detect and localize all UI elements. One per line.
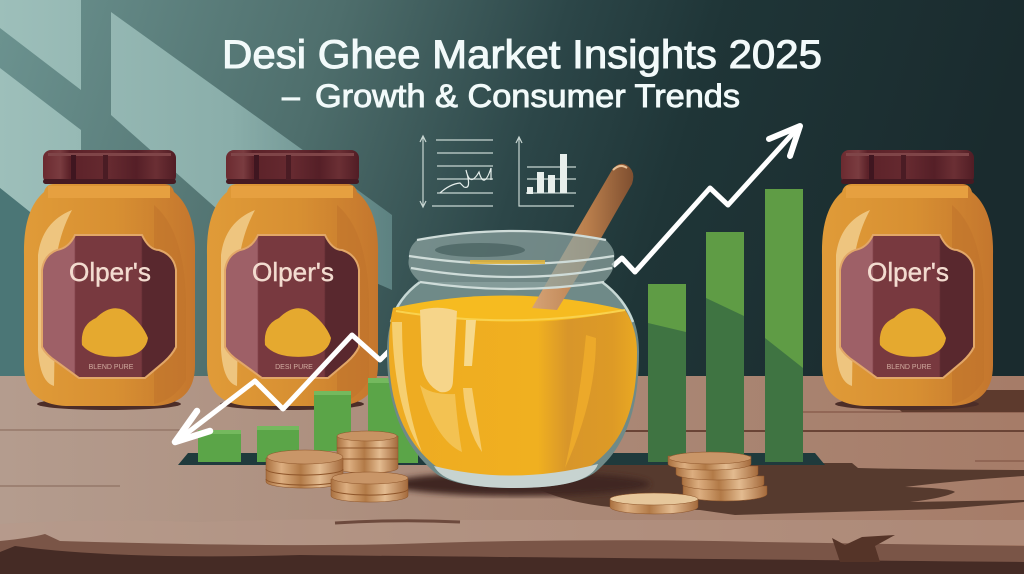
ghee highlights: [420, 308, 457, 392]
line chart icon: [420, 136, 493, 207]
glass jar of ghee: [387, 164, 639, 488]
jar: middle: [207, 150, 378, 410]
window light beams: [0, 0, 392, 290]
label: [225, 235, 359, 378]
shadow under glass jar: [390, 472, 650, 496]
butter icon: [265, 308, 331, 357]
bar chart icon: [516, 137, 576, 206]
jar: left: BLEND PURE: [89, 364, 134, 371]
coin stack: right: [610, 452, 767, 514]
wooden table: [0, 376, 1024, 574]
ghee fill: [389, 297, 637, 478]
brand name: Olper's: [69, 257, 151, 287]
bar chart base: [178, 453, 825, 465]
background wall: [0, 0, 1024, 400]
label: [42, 235, 176, 378]
butter icon: [82, 308, 148, 357]
table shadow: [540, 463, 1024, 515]
glass body: [387, 282, 639, 488]
subtitle: Growth & Consumer Trends: [315, 78, 740, 114]
small green bars: [198, 378, 418, 463]
coin stack: left: [266, 431, 408, 502]
jar: middle: DESI PURE: [275, 364, 313, 371]
table front edge: [0, 519, 1024, 545]
title: Desi Ghee Market Insights 2025: [222, 33, 822, 77]
brand name: Olper's: [252, 257, 334, 287]
tall green bars: [648, 189, 803, 462]
jar: left: [24, 150, 195, 410]
brand name: Olper's: [867, 257, 949, 287]
wooden spoon: [532, 164, 633, 310]
growth arrow: [175, 126, 800, 442]
jar: right: [822, 150, 1024, 412]
label: [840, 235, 974, 378]
jar rim: [408, 230, 614, 289]
jar: right: BLEND PURE: [887, 364, 932, 371]
lower wall shade: [0, 188, 81, 380]
subtitle: –: [282, 78, 300, 114]
butter icon: [880, 308, 946, 357]
